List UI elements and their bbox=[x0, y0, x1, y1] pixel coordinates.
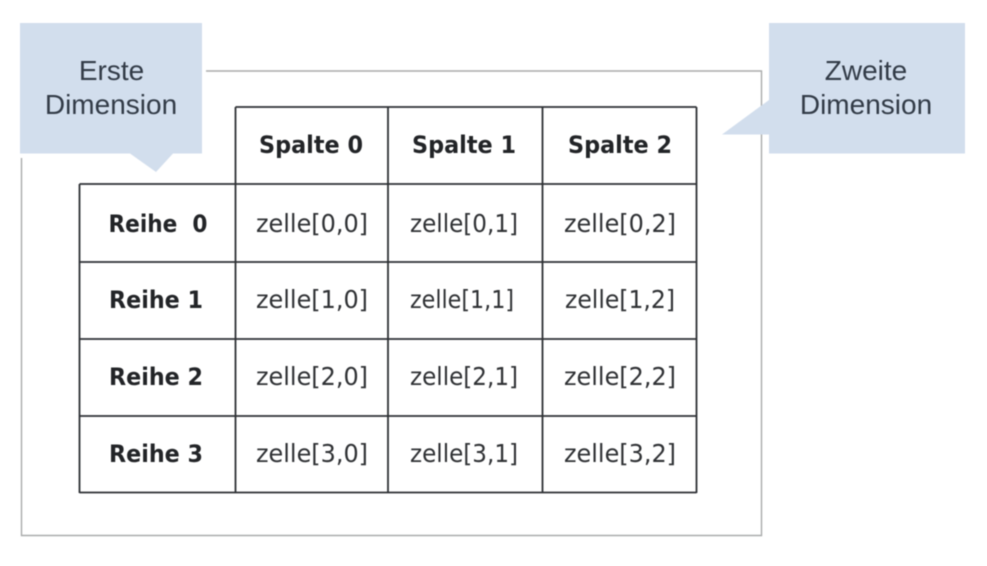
callout: Erste Dimension: Dimension bbox=[45, 89, 177, 120]
cell labels: zelle[1,0] bbox=[256, 285, 368, 314]
callout: Zweite Dimension: Dimension bbox=[800, 89, 932, 120]
cell labels: zelle[2,2] bbox=[564, 362, 676, 391]
callout: Zweite Dimension: Zweite bbox=[825, 55, 907, 86]
outer frame bbox=[22, 71, 762, 536]
table grid bbox=[80, 107, 696, 493]
callout: Zweite Dimension bbox=[722, 23, 965, 154]
cell labels: zelle[0,0] bbox=[256, 209, 368, 238]
cell labels: zelle[2,0] bbox=[256, 362, 368, 391]
column headers bbox=[259, 131, 672, 159]
column headers: Spalte 1 bbox=[412, 131, 516, 159]
row headers: Reihe 1 bbox=[109, 286, 203, 314]
cell labels: zelle[0,1] bbox=[410, 209, 518, 238]
cell labels: zelle[3,2] bbox=[564, 439, 676, 468]
row headers: Reihe 0 bbox=[108, 210, 208, 238]
row headers: Reihe 2 bbox=[109, 363, 203, 391]
table bbox=[80, 107, 696, 493]
callout: Erste Dimension: Erste bbox=[79, 55, 144, 86]
cell labels: zelle[2,1] bbox=[410, 362, 518, 391]
cell labels: zelle[1,1] bbox=[410, 285, 514, 314]
cell labels: zelle[3,0] bbox=[256, 439, 368, 468]
column headers: Spalte 2 bbox=[568, 131, 672, 159]
row headers bbox=[108, 210, 208, 468]
cell labels bbox=[256, 209, 676, 468]
callout: Erste Dimension bbox=[20, 23, 202, 172]
cell labels: zelle[0,2] bbox=[564, 209, 676, 238]
row headers: Reihe 3 bbox=[109, 440, 203, 468]
column headers: Spalte 0 bbox=[259, 131, 363, 159]
cell labels: zelle[1,2] bbox=[565, 285, 675, 314]
cell labels: zelle[3,1] bbox=[410, 439, 518, 468]
